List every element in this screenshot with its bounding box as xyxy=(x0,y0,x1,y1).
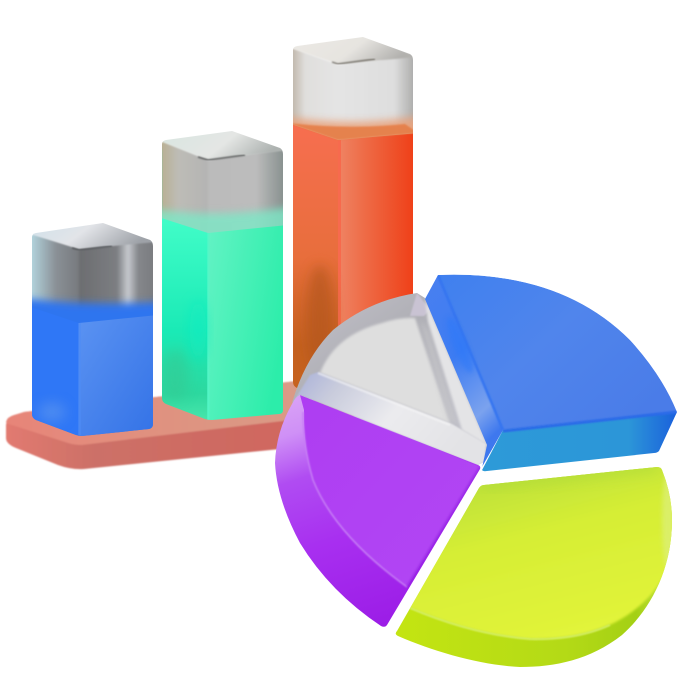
lime slice side face xyxy=(396,467,672,667)
blue slice left side face xyxy=(420,275,503,474)
pie slice: purple xyxy=(270,390,485,632)
red bar liquid xyxy=(293,114,413,416)
purple slice side face xyxy=(270,390,485,632)
blue bar glass top xyxy=(32,223,153,309)
green bar xyxy=(162,131,283,420)
green bar liquid xyxy=(162,204,283,420)
blue slice front face xyxy=(480,412,678,474)
pie slice: blue xyxy=(420,275,678,474)
base platform xyxy=(6,381,300,469)
lime slice top face xyxy=(400,462,680,639)
pie chart xyxy=(270,275,680,675)
green bar glass top xyxy=(162,131,283,233)
blue bar liquid xyxy=(32,293,153,436)
pie slice: glass xyxy=(292,293,487,465)
glass inner face xyxy=(320,318,450,423)
blue slice top face xyxy=(438,275,677,430)
purple slice top face xyxy=(300,395,480,587)
red bar xyxy=(293,37,413,416)
red bar glass top xyxy=(293,37,413,128)
pie slice: lime xyxy=(396,467,672,667)
glass front strip xyxy=(292,372,486,465)
blue bar xyxy=(32,223,153,436)
